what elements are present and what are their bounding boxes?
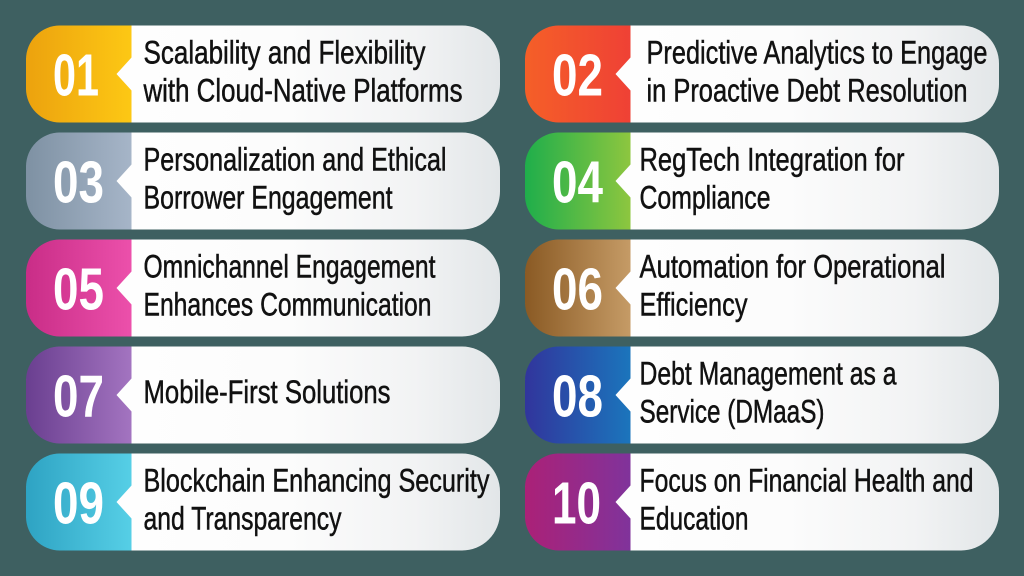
panel: 10 Financial Health: [525, 454, 999, 550]
panel: 06 Automation: 06: [552, 256, 603, 322]
panel: 01 Scalability and Flexibility: Scalability and Flexibility: [144, 34, 426, 70]
panel: 04 RegTech: Compliance: [640, 180, 770, 216]
panel: 06 Automation: [525, 240, 999, 336]
panel: 07 Mobile-First: Mobile-First Solutions: [144, 374, 390, 410]
panel: 02 Predictive Analytics: 02: [552, 42, 603, 108]
panel: 10 Financial Health: Education: [640, 500, 748, 536]
panel: 09 Blockchain: [26, 454, 500, 550]
panel: 06 Automation: Efficiency: [640, 286, 748, 322]
panel: 01 Scalability and Flexibility: with Cloud-Native Platforms: [143, 72, 462, 108]
panel: 03 Personalization: [26, 132, 500, 230]
panel: 03 Personalization: Borrower Engagement: [144, 180, 393, 216]
panel: 05 Omnichannel: 05: [53, 256, 104, 322]
panel: 09 Blockchain: 09: [53, 470, 104, 536]
panel: 08 DMaaS: Service (DMaaS): [640, 394, 824, 430]
panel: 07 Mobile-First: 07: [53, 364, 104, 430]
panel: 04 RegTech: 04: [552, 150, 603, 216]
panel: 05 Omnichannel: Enhances Communication: [144, 286, 432, 322]
panel: 03 Personalization: Personalization and Ethical: [144, 142, 446, 178]
panel: 01 Scalability and Flexibility: [26, 26, 500, 122]
panel: 09 Blockchain: and Transparency: [144, 500, 342, 536]
panel: 01 Scalability and Flexibility: 01: [53, 42, 99, 108]
panel: 08 DMaaS: 08: [552, 364, 603, 430]
panel: 05 Omnichannel: [26, 240, 500, 336]
panel: 03 Personalization: 03: [53, 150, 104, 216]
panel: 09 Blockchain: Blockchain Enhancing Security: [144, 462, 490, 498]
panel: 04 RegTech: [525, 132, 999, 230]
panel: 05 Omnichannel: Omnichannel Engagement: [144, 248, 436, 284]
panel: 08 DMaaS: [525, 346, 999, 444]
panel: 10 Financial Health: 10: [552, 470, 601, 536]
panel: 08 DMaaS: Debt Management as a: [640, 356, 897, 392]
panel: 07 Mobile-First: [26, 346, 500, 444]
panel: 02 Predictive Analytics: [525, 26, 999, 122]
panel: 04 RegTech: RegTech Integration for: [640, 142, 905, 178]
panel: 06 Automation: Automation for Operational: [640, 248, 946, 284]
